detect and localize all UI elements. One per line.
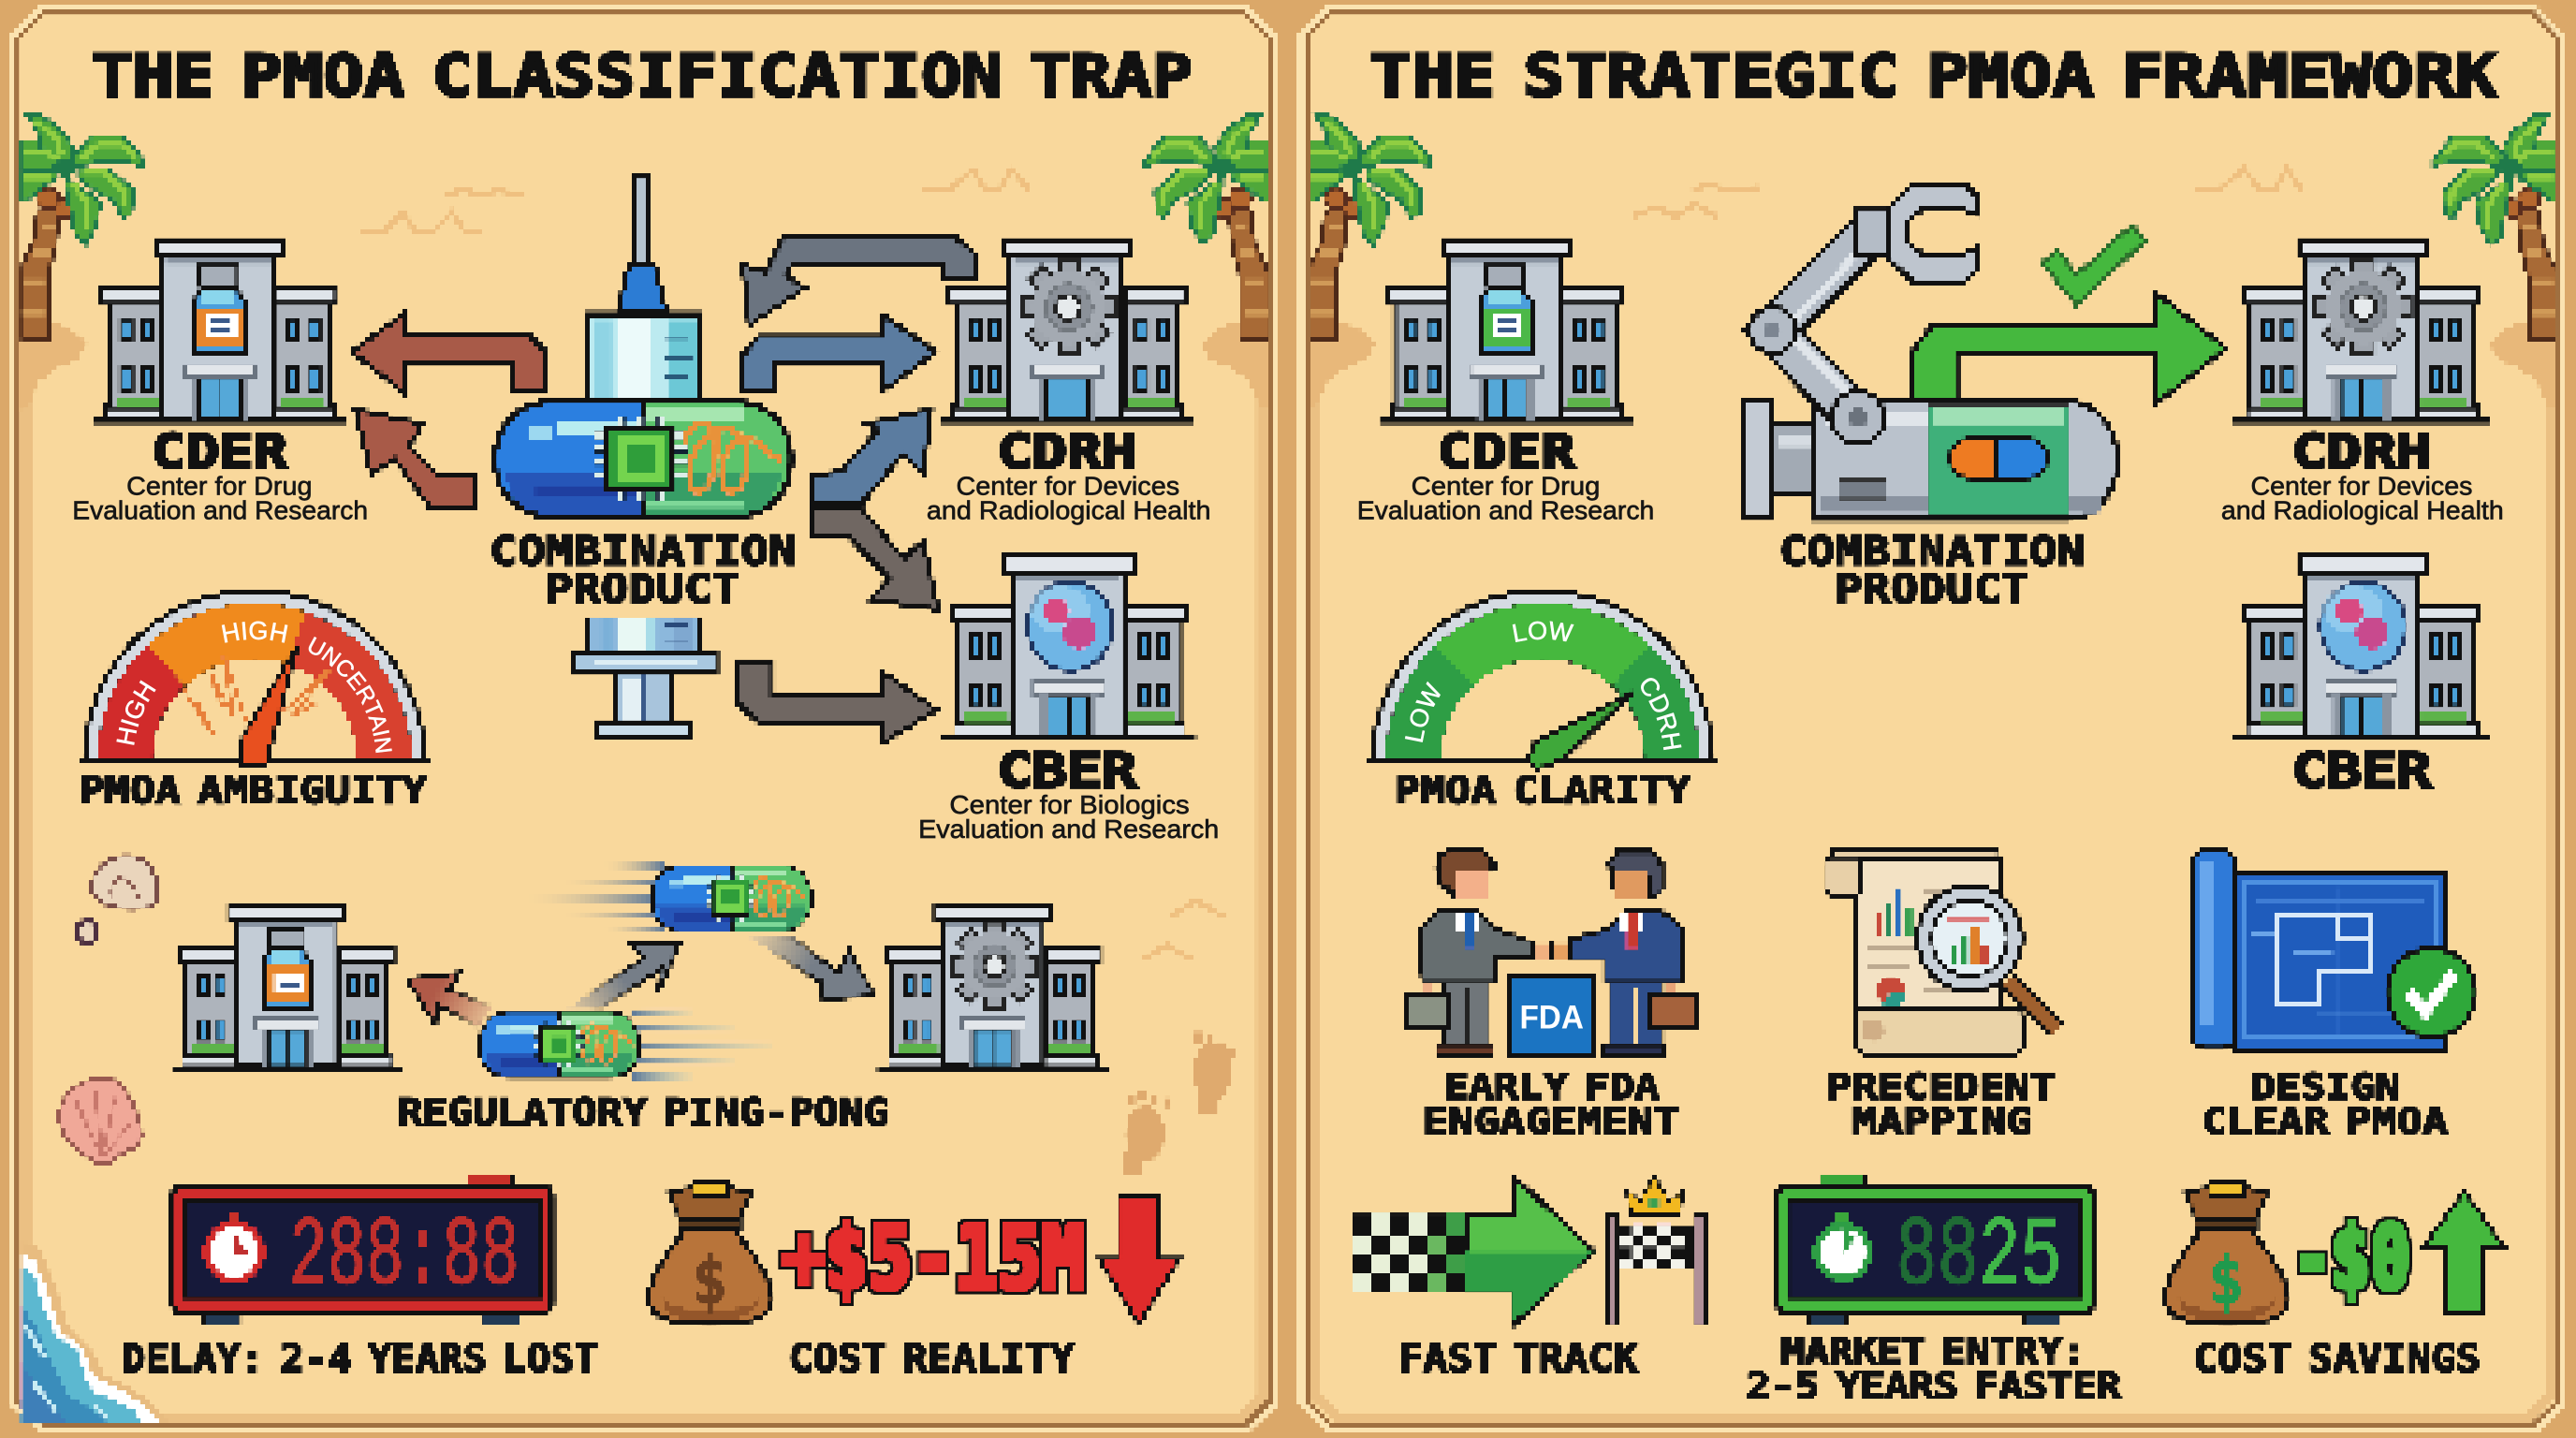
arrow to CBER lower bbox=[738, 661, 936, 744]
label CDER: CDER bbox=[151, 425, 288, 480]
gauge labels: CDRH bbox=[1641, 678, 1681, 751]
label cost savings: COST SAVINGS bbox=[2193, 1336, 2481, 1382]
arrow ping-pong up bbox=[567, 943, 681, 1009]
cost value: +$5-15M bbox=[782, 1207, 1084, 1310]
ocean corner bbox=[22, 1240, 169, 1421]
cost arrow down bbox=[1099, 1196, 1179, 1325]
CBER description: Center for Biologics bbox=[949, 790, 1190, 819]
label CDER: CDER bbox=[1438, 425, 1576, 480]
label delay: DELAY: 2-4 YEARS LOST bbox=[122, 1336, 598, 1382]
label precedent mapping: MAPPING bbox=[1852, 1101, 2032, 1143]
label PMOA ambiguity: PMOA AMBIGUITY bbox=[79, 769, 428, 813]
label design clear PMOA: CLEAR PMOA bbox=[2202, 1101, 2448, 1143]
palm tree right bbox=[2433, 115, 2556, 411]
ping-pong building CDRH bbox=[877, 904, 1109, 1071]
speed lines upper bbox=[520, 862, 664, 933]
building CBER bbox=[942, 556, 1196, 741]
panel frame bbox=[19, 14, 1269, 1425]
sand ripples bbox=[361, 169, 1224, 960]
CDER description: Evaluation and Research bbox=[72, 496, 368, 525]
CBER description bbox=[918, 790, 1219, 844]
dollar sign: $ bbox=[692, 1242, 728, 1319]
icon: handshake with FDA bbox=[1408, 849, 1695, 1057]
title: THE STRATEGIC PMOA FRAMEWORK bbox=[1370, 42, 2497, 110]
CBER description: Evaluation and Research bbox=[918, 814, 1219, 844]
CDER description bbox=[1357, 471, 1654, 525]
label precedent mapping bbox=[1827, 1066, 2056, 1143]
gauge: PMOA ambiguity bbox=[79, 588, 431, 764]
CDER description bbox=[72, 471, 368, 525]
green route arrow bbox=[1912, 291, 2226, 406]
building CDER bbox=[92, 239, 346, 424]
palm tree left bbox=[1308, 115, 1431, 411]
label CBER: CBER bbox=[2291, 744, 2432, 800]
CDRH description bbox=[927, 471, 1211, 525]
footprints bbox=[1122, 1032, 1236, 1173]
label regulatory ping-pong: REGULATORY PING-PONG bbox=[398, 1091, 889, 1135]
title: THE PMOA CLASSIFICATION TRAP bbox=[92, 42, 1193, 110]
label market entry bbox=[1747, 1331, 2122, 1408]
arrow to CDER upper bbox=[352, 314, 546, 392]
gauge labels: UNCERTAIN bbox=[309, 637, 392, 753]
label market entry: MARKET ENTRY: bbox=[1781, 1331, 2086, 1373]
FDA logo text: FDA bbox=[1519, 1000, 1584, 1036]
icon: scroll and magnifier bbox=[1825, 849, 2056, 1055]
CDRH description: and Radiological Health bbox=[2221, 496, 2504, 525]
label combination product bbox=[490, 529, 797, 613]
arrow to CDRH lower bbox=[813, 409, 931, 505]
panel: the strategic PMOA framework bbox=[1296, 5, 2565, 1432]
label combination product: COMBINATION bbox=[490, 529, 797, 576]
CDER description: Center for Drug bbox=[1412, 471, 1600, 500]
check mark bbox=[2042, 225, 2145, 305]
panel frame bbox=[1307, 14, 2557, 1425]
arrow ping-pong down bbox=[748, 936, 874, 999]
building CBER bbox=[2234, 556, 2489, 741]
arrow to CDRH upper bbox=[742, 314, 936, 392]
shell small tan bbox=[92, 856, 158, 909]
label early FDA engagement: ENGAGEMENT bbox=[1423, 1101, 1679, 1143]
CDRH description: and Radiological Health bbox=[927, 496, 1211, 525]
market entry timer bbox=[1778, 1175, 2093, 1325]
arrow to CBER upper bbox=[813, 507, 938, 609]
CDER description: Evaluation and Research bbox=[1357, 496, 1654, 525]
arrow to CDER lower bbox=[355, 409, 475, 507]
label PMOA clarity: PMOA CLARITY bbox=[1395, 769, 1691, 813]
label combination product: COMBINATION bbox=[1779, 529, 2085, 576]
syringe bbox=[572, 178, 716, 739]
robot arm bbox=[1749, 184, 1978, 444]
dollar sign: $ bbox=[2208, 1242, 2244, 1319]
label early FDA engagement bbox=[1423, 1066, 1679, 1143]
icon: fast track arrow bbox=[1354, 1177, 1593, 1325]
label precedent mapping: PRECEDENT bbox=[1827, 1066, 2056, 1108]
label CDRH: CDRH bbox=[2291, 425, 2432, 480]
CDER description: Center for Drug bbox=[126, 471, 312, 500]
ping-pong building CDER bbox=[171, 904, 402, 1071]
sand ripples bbox=[1632, 169, 2302, 217]
label market entry: 2-5 YEARS FASTER bbox=[1747, 1366, 2122, 1408]
label CDRH: CDRH bbox=[997, 425, 1137, 480]
timer digits: 8825 bbox=[1895, 1201, 2062, 1313]
label early FDA engagement: EARLY FDA bbox=[1444, 1066, 1660, 1108]
capsule lower bbox=[479, 1012, 639, 1078]
gauge labels: LOW bbox=[1404, 682, 1441, 742]
shell pink bbox=[59, 1078, 141, 1164]
gauge labels bbox=[1404, 621, 1681, 751]
combination capsule bbox=[495, 402, 791, 517]
CDRH description: Center for Devices bbox=[2250, 471, 2472, 500]
timer digits: 288:88 bbox=[289, 1201, 520, 1313]
savings money bag bbox=[2165, 1181, 2289, 1325]
label combination product: PRODUCT bbox=[546, 566, 739, 613]
CDRH description: Center for Devices bbox=[956, 471, 1179, 500]
label combination product bbox=[1779, 529, 2085, 613]
gauge labels: HIGH bbox=[116, 680, 156, 745]
gauge: PMOA clarity bbox=[1367, 588, 1719, 769]
cost money bag bbox=[649, 1181, 772, 1325]
gauge labels: HIGH bbox=[221, 622, 288, 643]
shell tiny bbox=[77, 921, 97, 943]
capsule upper bbox=[651, 866, 812, 932]
label design clear PMOA: DESIGN bbox=[2250, 1066, 2400, 1108]
arrow from CDRH back bbox=[742, 237, 976, 326]
gauge labels: LOW bbox=[1513, 621, 1574, 642]
label cost reality: COST REALITY bbox=[788, 1336, 1075, 1382]
building CDRH bbox=[2234, 239, 2489, 424]
label CBER: CBER bbox=[997, 744, 1137, 800]
icon: finish flag and crown bbox=[1606, 1177, 1705, 1325]
building CDRH bbox=[940, 239, 1194, 424]
palm tree left bbox=[20, 115, 143, 411]
palm tree right bbox=[1145, 115, 1268, 411]
building CDER bbox=[1379, 239, 1633, 424]
label fast track: FAST TRACK bbox=[1398, 1336, 1638, 1382]
CDRH description bbox=[2221, 471, 2504, 525]
speed lines lower bbox=[633, 1009, 772, 1079]
savings value: -$0 bbox=[2291, 1207, 2410, 1310]
icon: blueprint with check bbox=[2191, 851, 2476, 1051]
gauge labels bbox=[116, 622, 392, 753]
label combination product: PRODUCT bbox=[1835, 566, 2029, 613]
panel: the PMOA classification trap bbox=[9, 5, 1278, 1432]
savings arrow up bbox=[2422, 1191, 2506, 1313]
robot arm tank bbox=[1745, 399, 2117, 520]
arrow ping-pong to CDER bbox=[407, 973, 493, 1027]
label design clear PMOA bbox=[2202, 1066, 2448, 1143]
delay timer bbox=[172, 1175, 552, 1325]
